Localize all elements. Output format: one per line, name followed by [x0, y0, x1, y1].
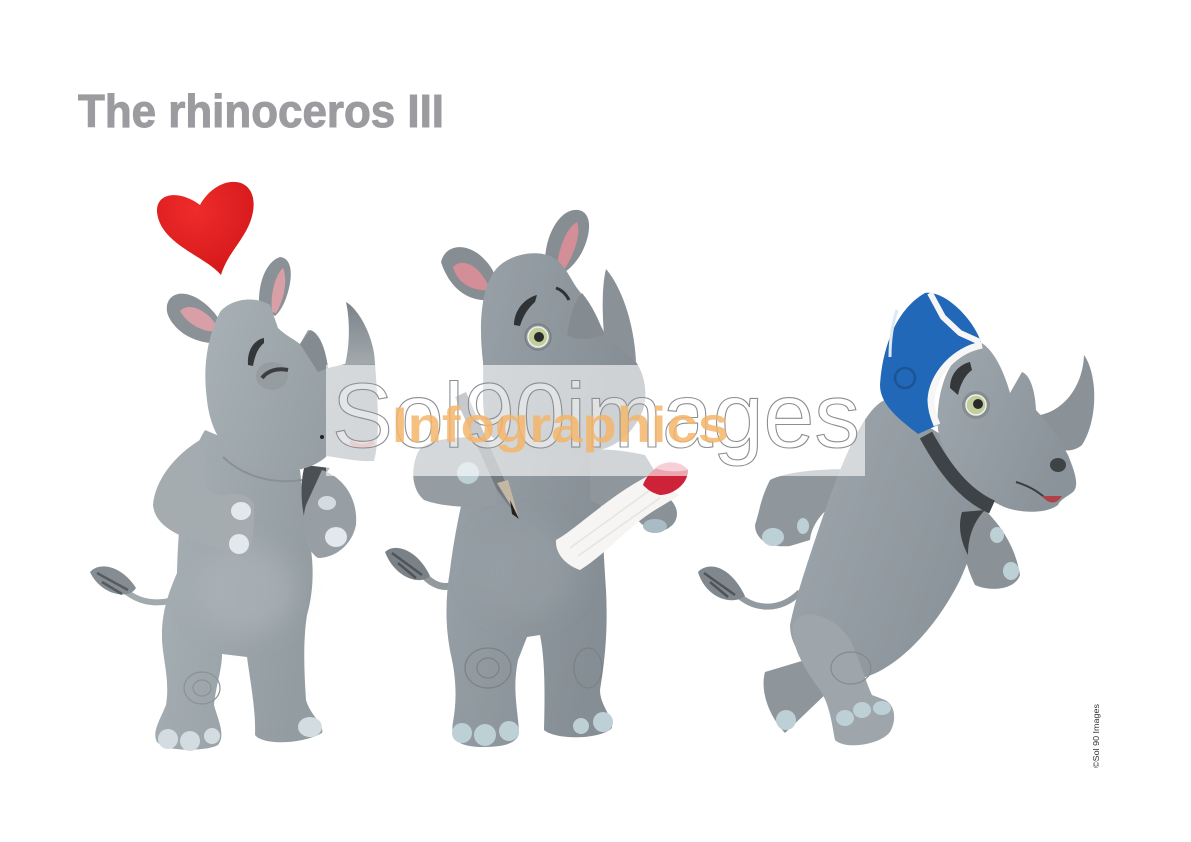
icon: red heart [157, 182, 254, 275]
title: The rhinoceros III [78, 85, 444, 137]
rhino running with helmet [698, 293, 1094, 745]
rhino writing [385, 210, 688, 747]
watermark logo: Sol90images [332, 365, 860, 467]
rhino in love [90, 257, 378, 751]
copyright: ©Sol 90 Images [1092, 704, 1101, 768]
watermark panel [326, 365, 865, 476]
watermark [326, 365, 865, 476]
watermark label: Infographics [392, 397, 729, 453]
